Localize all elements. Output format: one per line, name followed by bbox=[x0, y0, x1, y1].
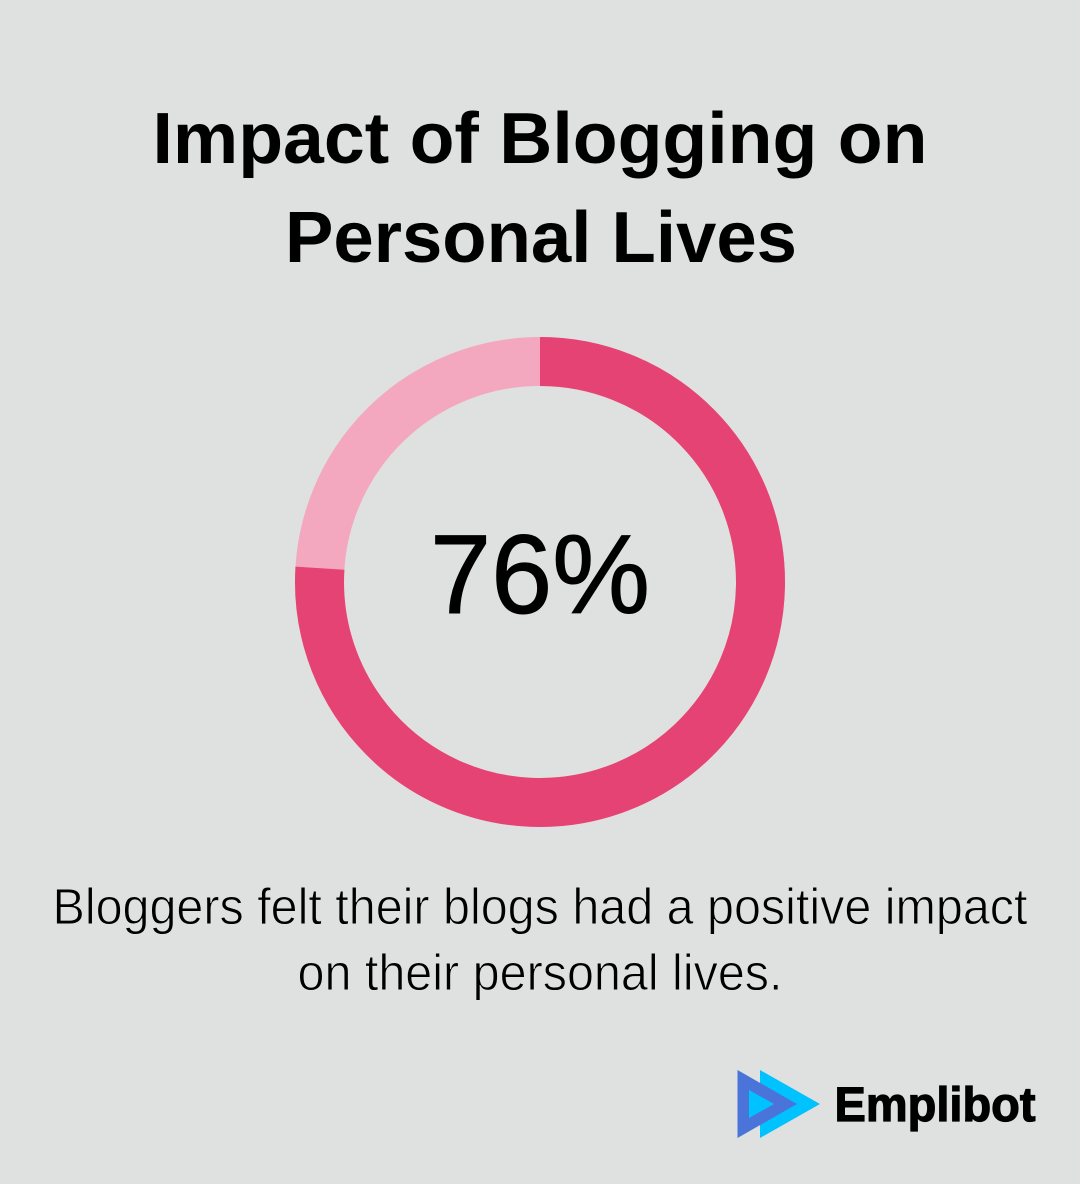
description bbox=[52, 878, 1028, 1001]
logo wordmark: Emplibot bbox=[834, 1079, 1036, 1132]
title: Personal Lives bbox=[285, 198, 797, 278]
donut value: 76% bbox=[430, 512, 650, 637]
logo: Emplibot bbox=[738, 1070, 1036, 1138]
donut chart: 76% bbox=[320, 361, 761, 802]
title: Impact of Blogging on bbox=[152, 99, 928, 179]
description: on their personal lives. bbox=[298, 944, 782, 1001]
description: Bloggers felt their blogs had a positive impact bbox=[52, 878, 1028, 935]
title bbox=[152, 99, 928, 278]
icon: play triangles bbox=[738, 1070, 820, 1138]
